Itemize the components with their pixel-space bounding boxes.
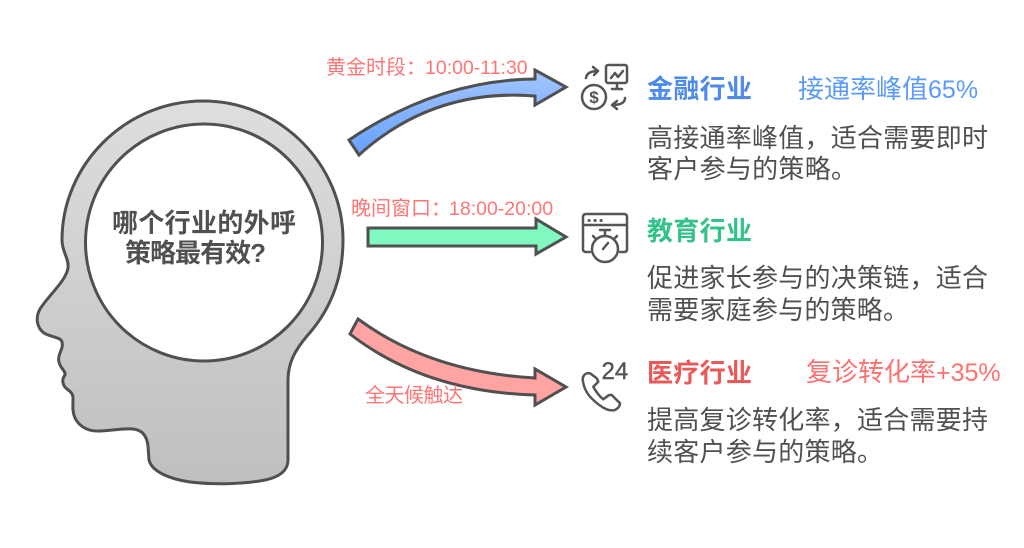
arrow: education [368,219,566,254]
label: golden hours: 黄金时段：10:00-11:30 [326,56,528,79]
brain circle [86,124,322,361]
description: finance: 客户参与的策略。 [647,154,857,184]
icon: finance [582,65,627,109]
head silhouette [37,101,343,484]
heading: healthcare: 医疗行业 [647,358,752,388]
arrow: healthcare [350,319,566,405]
description: education: 促进家长参与的决策链，适合 [647,263,988,293]
central question: 哪个行业的外呼 [112,208,296,238]
panel: education [647,216,988,325]
heading: finance: 金融行业 [647,74,752,104]
label: evening window: 晚间窗口：18:00-20:00 [351,197,553,220]
description: education: 需要家庭参与的策略。 [647,295,909,325]
description: finance: 高接通率峰值，适合需要即时 [647,123,988,153]
central question: 策略最有效? [125,238,266,268]
panel: finance [647,74,988,184]
icon: finance: $ [589,88,599,107]
label: all day: 全天候触达 [365,384,463,407]
stat: finance: 接通率峰值65% [798,74,978,104]
icon: stopwatch [583,214,627,262]
description: finance [647,123,988,184]
description: healthcare: 续客户参与的策略。 [647,437,883,467]
arrow: finance [349,70,566,155]
icon: 24h phone: 24 [602,358,628,385]
description: healthcare [647,405,988,467]
panel: healthcare [647,357,1001,467]
heading: education: 教育行业 [647,216,752,246]
stat: healthcare: 复诊转化率+35% [806,357,1001,387]
icon: 24h phone [583,358,628,410]
description: healthcare: 提高复诊转化率，适合需要持 [647,405,988,435]
description: education [647,263,988,325]
central question [112,208,296,268]
head illustration [37,101,343,484]
